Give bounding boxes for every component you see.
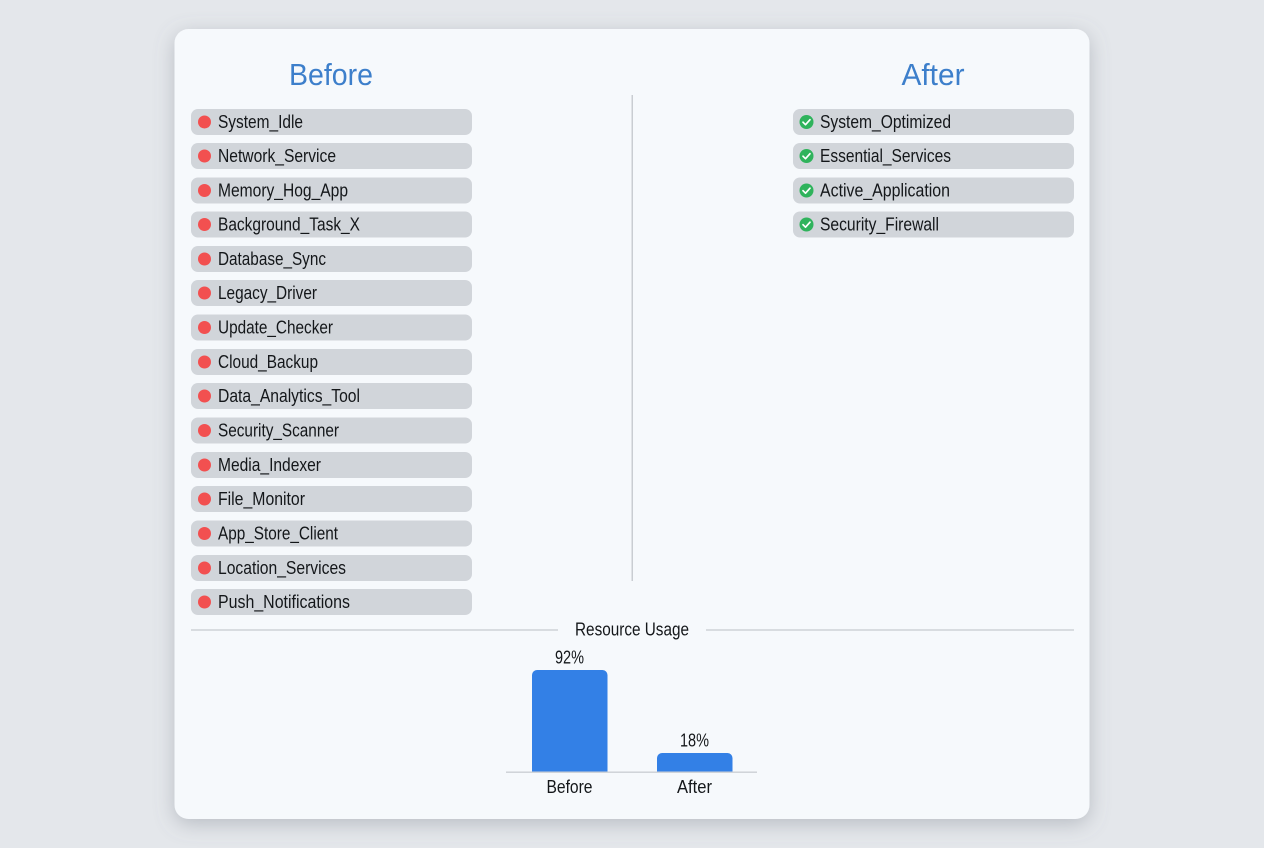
item: Background_Task_X: Background_Task_X	[218, 214, 360, 236]
bar: Before 92%	[532, 648, 608, 797]
item: System_Idle	[191, 109, 472, 135]
item: Database_Sync	[191, 246, 472, 272]
item: Media_Indexer: Media_Indexer	[218, 454, 321, 476]
item: Memory_Hog_App	[191, 178, 472, 204]
item: Legacy_Driver: Legacy_Driver	[218, 282, 317, 304]
item: Security_Firewall	[793, 212, 1074, 238]
item: Essential_Services: Essential_Services	[820, 145, 951, 167]
item: App_Store_Client: App_Store_Client	[218, 522, 338, 544]
heading: Before: Before	[289, 57, 373, 92]
item: Database_Sync: Database_Sync	[218, 248, 326, 270]
item: Push_Notifications: Push_Notifications	[218, 591, 350, 613]
panel: before process list	[191, 109, 472, 615]
item: Network_Service: Network_Service	[218, 145, 336, 167]
item: Active_Application: Active_Application	[820, 180, 950, 202]
item: Media_Indexer	[191, 452, 472, 478]
bar: After 18%: 18%	[680, 730, 709, 750]
item: Update_Checker	[191, 314, 472, 340]
heading: After: After	[902, 57, 964, 92]
item: Cloud_Backup: Cloud_Backup	[218, 351, 318, 373]
bar: After 18%	[657, 730, 732, 797]
item: System_Optimized: System_Optimized	[820, 111, 951, 133]
item: Update_Checker: Update_Checker	[218, 316, 333, 338]
item: File_Monitor	[191, 486, 472, 512]
item: Essential_Services	[793, 143, 1074, 169]
bar: Before 92%: Before	[546, 777, 592, 797]
item: Active_Application	[793, 178, 1074, 204]
item: Security_Scanner: Security_Scanner	[218, 420, 339, 442]
bar chart: resource usage	[506, 648, 757, 797]
item: Security_Scanner	[191, 418, 472, 444]
item: Legacy_Driver	[191, 280, 472, 306]
bar: Before 92%: 92%	[555, 648, 584, 668]
panel: main card	[174, 29, 1090, 819]
item: Data_Analytics_Tool: Data_Analytics_Tool	[218, 385, 360, 407]
item: Cloud_Backup	[191, 349, 472, 375]
item: App_Store_Client	[191, 520, 472, 546]
item: Push_Notifications	[191, 589, 472, 615]
item: Data_Analytics_Tool	[191, 383, 472, 409]
item: System_Optimized	[793, 109, 1074, 135]
bar: After 18%: After	[677, 777, 712, 797]
panel: after process list	[793, 109, 1074, 238]
item: File_Monitor: File_Monitor	[218, 488, 305, 510]
item: System_Idle: System_Idle	[218, 111, 303, 133]
center divider	[632, 95, 633, 581]
section heading: Resource Usage: Resource Usage	[575, 620, 689, 640]
item: Memory_Hog_App: Memory_Hog_App	[218, 180, 348, 202]
item: Security_Firewall: Security_Firewall	[820, 214, 939, 236]
item: Location_Services: Location_Services	[218, 557, 346, 579]
item: Location_Services	[191, 555, 472, 581]
item: Background_Task_X	[191, 212, 472, 238]
item: Network_Service	[191, 143, 472, 169]
